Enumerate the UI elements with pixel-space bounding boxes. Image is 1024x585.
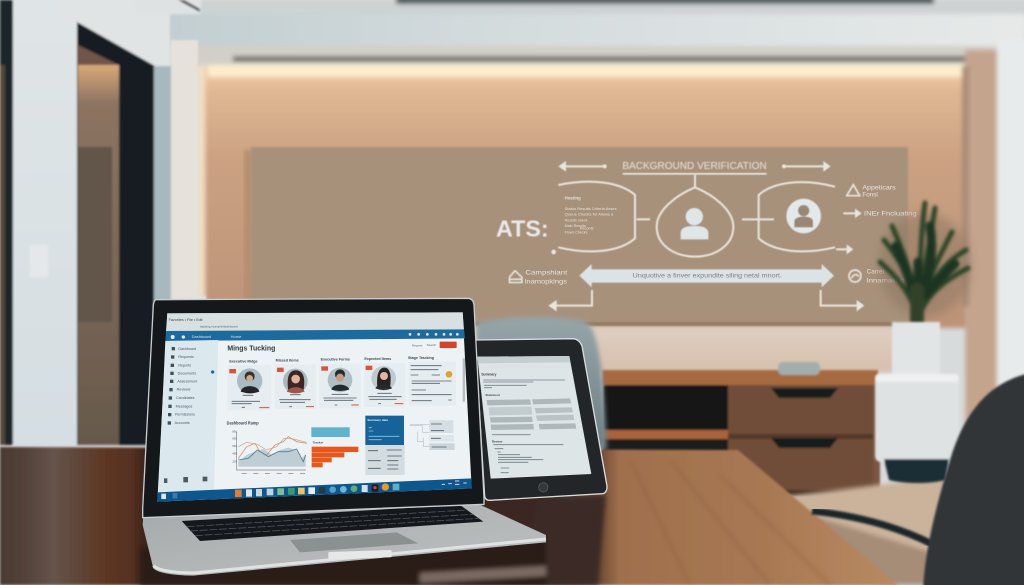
app header bbox=[165, 329, 465, 341]
info panel bbox=[365, 416, 405, 475]
bar chart bbox=[311, 427, 358, 467]
tablet content: Summary bbox=[481, 373, 497, 377]
laptop bbox=[143, 298, 546, 576]
line chart: 200 bbox=[232, 459, 237, 463]
right label text: INEr Fncluating bbox=[864, 211, 917, 218]
label: ATS: ATS: bbox=[496, 216, 549, 242]
table top bbox=[0, 447, 898, 585]
laptop screen: Reports bbox=[178, 363, 191, 367]
line chart: 600 bbox=[232, 437, 237, 441]
laptop screen: tracking.example/dashboard bbox=[200, 324, 238, 328]
tablet content: Review bbox=[492, 440, 503, 444]
heading: background verification: BACKGROUND VERIFICATION bbox=[622, 161, 767, 172]
lower left text: Inamopkings bbox=[524, 278, 568, 285]
left wall and doorway bbox=[0, 0, 206, 448]
person icon: right bbox=[786, 199, 821, 233]
arrowheads bbox=[548, 161, 864, 311]
left bubble text: Records bbox=[580, 226, 594, 230]
left bubble text bbox=[565, 195, 617, 234]
right label text bbox=[862, 185, 917, 284]
vase and pedestal bbox=[875, 322, 959, 483]
candidate cards: Executive Ridge bbox=[229, 360, 258, 364]
line chart: 500 bbox=[232, 444, 237, 448]
right label text: Innamaliad bbox=[867, 277, 905, 284]
line chart: 400 bbox=[232, 451, 237, 455]
right labels bbox=[847, 185, 861, 282]
candidate card details bbox=[232, 366, 452, 407]
lower left text: Campshiant bbox=[525, 270, 567, 277]
info panel: Summary data bbox=[367, 418, 388, 422]
plant in white vase on pedestal bbox=[875, 203, 971, 483]
tablet bbox=[475, 339, 607, 500]
tablet body bbox=[475, 339, 607, 500]
candidate cards: Missed Items bbox=[276, 359, 299, 363]
right label text: Fonsl bbox=[862, 192, 878, 199]
laptop base bbox=[143, 502, 546, 576]
candidate portraits bbox=[237, 366, 396, 394]
page title: Mings Tucking bbox=[227, 344, 276, 353]
page title actions bbox=[412, 343, 436, 347]
laptop screen: Dashboard bbox=[178, 347, 196, 351]
bar chart: Tracker bbox=[313, 440, 324, 444]
lower left icon bbox=[509, 271, 522, 283]
laptop lid bbox=[143, 298, 484, 518]
console cabinet bbox=[602, 362, 880, 498]
left bubble text: Hosting bbox=[565, 195, 581, 200]
keyboard bbox=[182, 505, 483, 541]
tablet screen bbox=[477, 356, 591, 479]
laptop screen: Requests bbox=[178, 355, 194, 359]
back wall bbox=[198, 65, 969, 372]
right foreground chair bbox=[923, 373, 1024, 585]
office chair behind the laptop bbox=[476, 317, 607, 450]
plant foliage bbox=[880, 203, 968, 322]
trackpad bbox=[290, 532, 418, 552]
left bubble text: Results check bbox=[565, 218, 588, 222]
table wood grain and reflections bbox=[140, 460, 830, 585]
left bubble text: Status Results Criteria Asses bbox=[565, 207, 617, 211]
laptop screen: Assessment bbox=[177, 379, 197, 383]
person icon: centre bbox=[681, 208, 708, 239]
laptop screen: Home bbox=[231, 334, 242, 339]
laptop screen: Documents bbox=[178, 371, 196, 375]
candidate cards: Stage Tracking bbox=[408, 356, 434, 360]
laptop screen: Candidates bbox=[176, 396, 195, 400]
left bubble text: Flows Checks bbox=[565, 230, 588, 234]
right label text: Carrer bbox=[867, 269, 885, 276]
candidate cards: Expected Items bbox=[364, 357, 391, 361]
left bubble text: Main Results bbox=[565, 224, 586, 228]
line chart: 800 bbox=[232, 429, 237, 433]
laptop screen: Reviews bbox=[177, 388, 191, 392]
laptop screen: Favorites • File • Edit bbox=[169, 318, 203, 322]
laptop screen: Accounts bbox=[175, 421, 190, 425]
laptop screen bbox=[157, 312, 472, 502]
flow tree bbox=[409, 420, 455, 450]
double arrow banner bbox=[579, 264, 834, 287]
candidate cards bbox=[229, 356, 434, 364]
wall display panel bbox=[244, 147, 908, 326]
dashboard section heading: Dashboard Ramp bbox=[227, 420, 259, 425]
laptop screen: Dashboard bbox=[192, 334, 211, 339]
sidebar bbox=[158, 340, 218, 493]
tablet home button bbox=[539, 483, 548, 492]
laptop front notch bbox=[328, 550, 392, 559]
page title actions: Search bbox=[427, 343, 436, 347]
banner caption: Unquotive a finver expundite siling netal mnort. bbox=[633, 274, 782, 280]
browser bar bbox=[166, 312, 464, 331]
page title actions: Reports bbox=[412, 343, 423, 347]
floor bbox=[780, 476, 960, 585]
lower left text bbox=[524, 270, 568, 285]
tablet content: Statement bbox=[485, 393, 500, 397]
right label text: Appeticars bbox=[862, 185, 896, 192]
laptop screen: Messages bbox=[176, 404, 193, 408]
taskbar bbox=[157, 478, 472, 502]
wall diagram: ATS background verification bbox=[496, 161, 917, 311]
laptop screen: Permissions bbox=[175, 413, 195, 417]
right armrest bbox=[812, 511, 932, 544]
candidate cards: Executive Forms bbox=[321, 358, 350, 362]
line chart bbox=[232, 429, 307, 474]
laptop base rim bbox=[153, 539, 546, 573]
left bubble text: Queue Checks for Allows a bbox=[565, 213, 614, 217]
plant shadow on wall bbox=[879, 213, 971, 317]
tablet content bbox=[477, 356, 576, 473]
diagram connectors and shapes bbox=[555, 166, 858, 306]
